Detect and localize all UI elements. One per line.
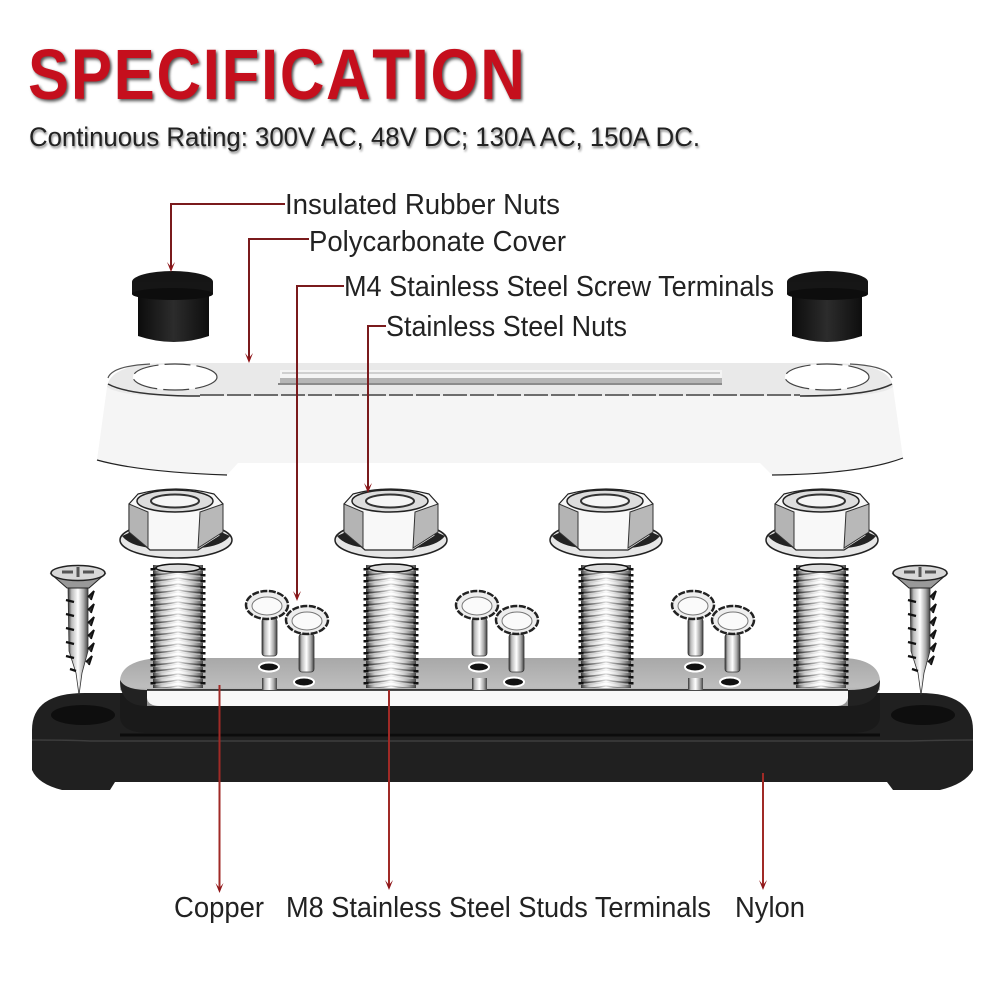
label: copper: Copper <box>174 892 264 924</box>
label: M4 stainless steel screw terminals: M4 Stainless Steel Screw Terminals <box>344 271 774 303</box>
wood screw: left <box>51 566 105 695</box>
label: polycarbonate cover: Polycarbonate Cover <box>309 226 566 258</box>
label: insulated rubber nuts: Insulated Rubber Nuts <box>285 189 560 221</box>
label: nylon: Nylon <box>735 892 805 924</box>
polycarbonate cover <box>97 363 903 475</box>
M8 studs <box>153 564 846 688</box>
base: nylon <box>32 693 973 790</box>
rubber nut: left <box>132 271 213 342</box>
copper plate <box>120 658 880 706</box>
label: nylon <box>735 773 805 924</box>
label: M4 stainless steel screw terminals <box>293 271 774 601</box>
label: stainless steel nuts: Stainless Steel Nuts <box>386 311 627 343</box>
label: polycarbonate cover <box>245 226 566 363</box>
label: stainless steel nuts <box>364 311 627 493</box>
subtitle: continuous rating: Continuous Rating: 300V AC, 48V DC; 130A AC, 150A DC. <box>29 122 700 152</box>
stainless steel nuts <box>120 489 878 558</box>
rubber nut: right <box>787 271 868 342</box>
label: insulated rubber nuts <box>167 189 560 272</box>
label: M8 stainless steel studs terminals <box>286 690 711 924</box>
M4 screw terminals <box>246 591 754 690</box>
title: SPECIFICATION <box>28 36 526 115</box>
label: M8 stainless steel studs terminals: M8 Stainless Steel Studs Terminals <box>286 892 711 924</box>
wood screw: right <box>893 566 947 695</box>
label: copper <box>174 685 264 924</box>
